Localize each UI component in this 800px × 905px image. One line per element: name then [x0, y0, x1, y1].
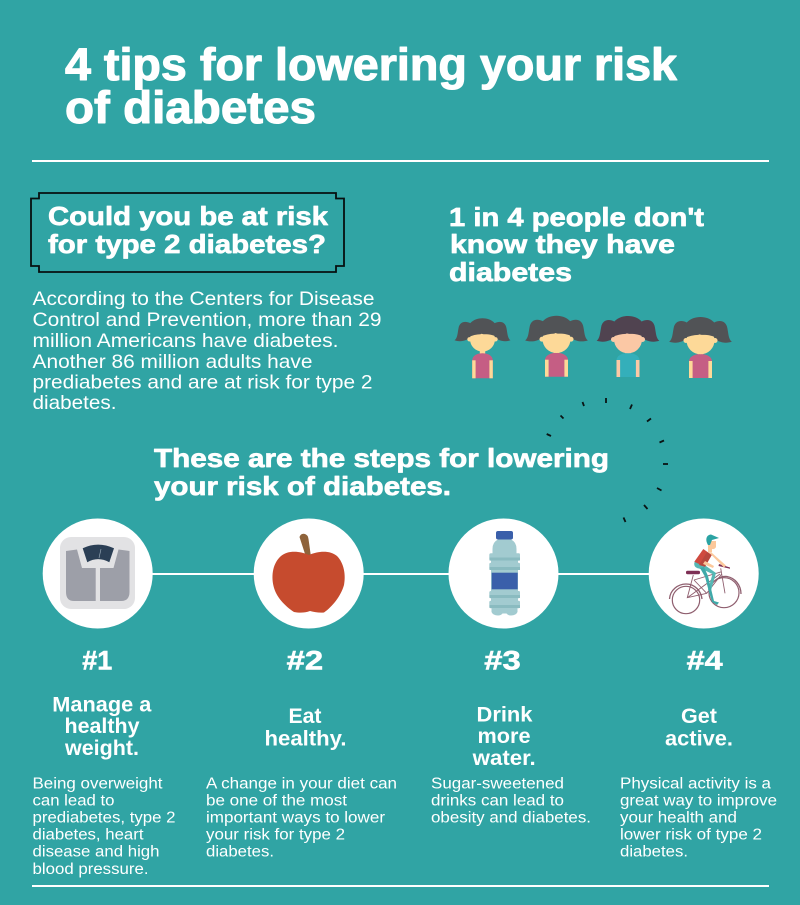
icon: girl 2 [525, 316, 588, 377]
text block: intro paragraph: million Americans have diabetes. [32, 330, 338, 352]
text block: intro paragraph: prediabetes and are at risk for type 2 [32, 372, 372, 394]
step 1: diabetes, heart [32, 826, 144, 844]
icon: girl 3 [597, 316, 659, 377]
step 2: important ways to lower [206, 810, 385, 827]
step 3: water. [472, 747, 536, 770]
step 4: diabetes. [620, 844, 688, 861]
step 2: #2 [287, 646, 323, 676]
heading: 1 in 4 statistic [449, 202, 704, 287]
panel: risk callout box [31, 193, 344, 272]
step 1: prediabetes, type 2 [32, 810, 176, 827]
heading: 1 in 4 statistic: diabetes [449, 257, 572, 287]
dashed arc [547, 398, 668, 522]
step 3: more [478, 725, 530, 748]
step 3 [431, 646, 591, 827]
heading: steps: your risk of diabetes. [154, 471, 451, 501]
step 1 [32, 646, 176, 878]
step 2: be one of the most [206, 793, 348, 810]
title: of diabetes [65, 82, 316, 133]
heading: 1 in 4 statistic: 1 in 4 people don't [449, 202, 704, 232]
step 3: obesity and diabetes. [431, 810, 591, 827]
step 4 [620, 646, 777, 861]
text block: intro paragraph: According to the Centers for Disease [32, 288, 374, 310]
step 2: Eat [288, 705, 322, 728]
title [65, 39, 678, 133]
text block: intro paragraph [32, 288, 382, 414]
step 1: Being overweight [32, 776, 163, 792]
icon: girl 4 [669, 317, 732, 378]
step 1: healthy [64, 715, 140, 738]
step 1: #1 [82, 646, 112, 676]
step 4: your health and [620, 810, 737, 827]
step 4: great way to improve [620, 793, 777, 810]
step 2: A change in your diet can [206, 776, 397, 792]
step 3: Sugar-sweetened [431, 776, 564, 792]
icon: cyclist [649, 518, 759, 628]
step 3: drinks can lead to [431, 793, 564, 810]
heading: 1 in 4 statistic: know they have [450, 229, 675, 259]
text block: intro paragraph: Another 86 million adults have [32, 351, 312, 373]
title: 4 tips for lowering your risk [65, 39, 678, 90]
step 4: active. [665, 728, 733, 750]
step 4: #4 [687, 646, 723, 676]
step 3: Drink [476, 704, 533, 726]
icon: four girls [454, 316, 732, 378]
icon: apple [254, 518, 364, 628]
step 1: blood pressure. [32, 861, 148, 878]
heading: steps [154, 443, 609, 501]
step 3: #3 [484, 646, 521, 676]
step 1: disease and high [32, 844, 160, 861]
panel: risk callout box: Could you be at risk [48, 201, 329, 231]
panel: risk callout box: for type 2 diabetes? [48, 229, 326, 259]
icon: water bottle [448, 518, 558, 628]
step 2: your risk for type 2 [206, 826, 345, 844]
icon: girl 1 [454, 318, 510, 378]
heading: steps: These are the steps for lowering [154, 443, 609, 473]
step 2: healthy. [264, 728, 346, 750]
step 4: Physical activity is a [620, 776, 771, 792]
text block: intro paragraph: Control and Prevention, more than 29 [32, 309, 382, 331]
step 4: Get [681, 705, 717, 728]
icon: bathroom scale [43, 518, 153, 628]
step 4: lower risk of type 2 [620, 826, 762, 844]
step 2: diabetes. [206, 844, 274, 861]
step 1: Manage a [52, 694, 152, 716]
step 1: can lead to [32, 793, 114, 810]
step 1: weight. [64, 737, 139, 760]
step 2 [206, 646, 397, 861]
text block: intro paragraph: diabetes. [32, 392, 116, 414]
